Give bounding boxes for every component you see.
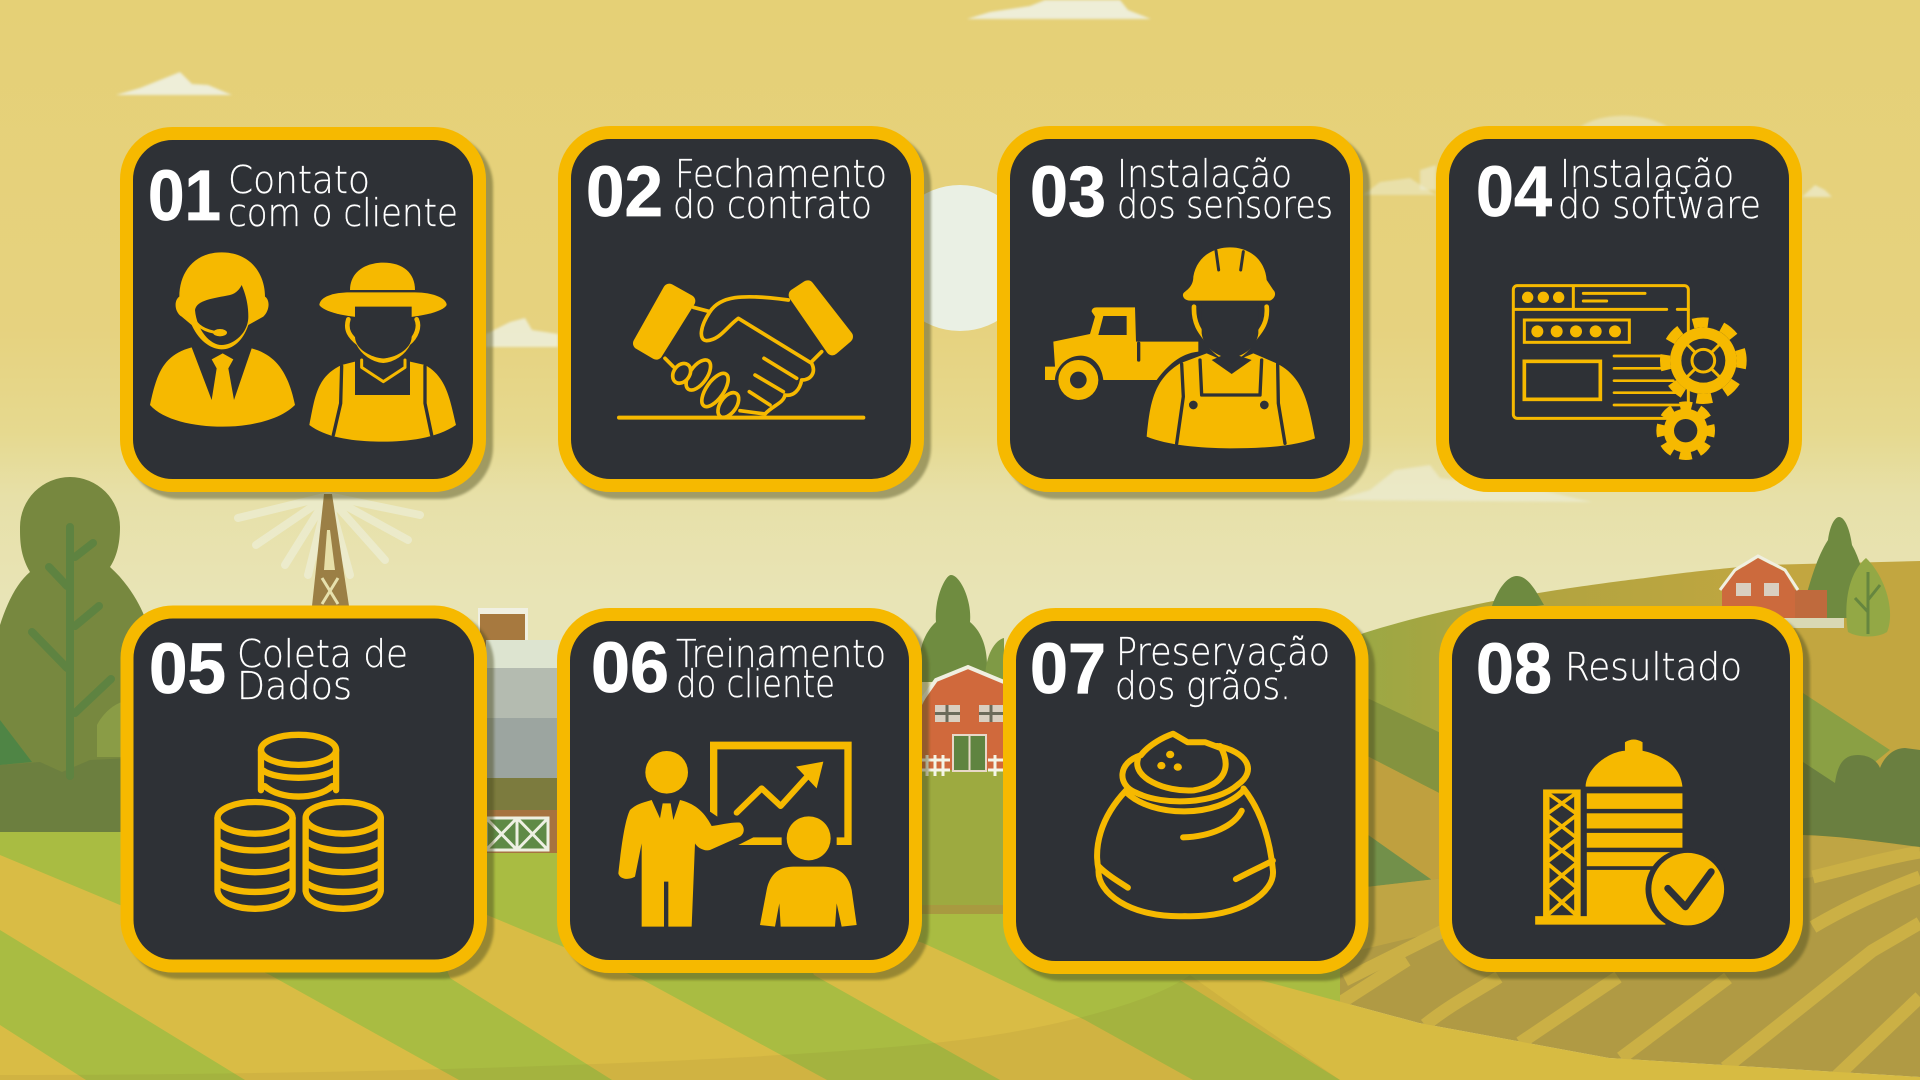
card 02 heading — [673, 152, 887, 227]
card 06: treinamento do cliente — [564, 614, 929, 980]
card 04 heading — [1558, 152, 1761, 227]
icon: software window and gears — [1513, 286, 1742, 456]
sun — [887, 185, 1033, 331]
card 03 heading — [1117, 152, 1333, 227]
card 03 shadow — [1004, 133, 1370, 499]
card 07 heading: dos grãos. — [1115, 664, 1291, 708]
card 06 number: 06 — [591, 629, 669, 708]
card 05 number: 05 — [149, 630, 226, 709]
icon: sack of grain — [1097, 734, 1273, 916]
card 08: resultado — [1446, 612, 1810, 979]
card 01: contato com o cliente — [126, 134, 493, 499]
card 01 heading: com o cliente — [228, 191, 458, 235]
card 02 number: 02 — [586, 153, 663, 232]
right bushes — [1803, 748, 1920, 847]
left tree — [0, 477, 152, 832]
icon: handshake — [619, 287, 863, 421]
card 03: instalação dos sensores — [1004, 132, 1370, 499]
card 05 shadow — [127, 612, 494, 979]
card 05 heading: Coleta de — [237, 632, 408, 676]
card 07 heading: Preservação — [1116, 630, 1330, 674]
card 04 heading: do software — [1558, 183, 1761, 227]
card 04 panel — [1442, 132, 1796, 486]
card 02: fechamento do contrato — [564, 132, 931, 499]
darker hill bands — [1340, 685, 1890, 900]
card 01 panel — [126, 134, 480, 486]
right barn — [1720, 517, 1890, 636]
card 04: instalação do software — [1442, 132, 1796, 486]
right field — [1200, 835, 1920, 1077]
icon: attendant and farmer — [150, 252, 456, 442]
card 03 heading: dos sensores — [1117, 183, 1333, 227]
card 07 number: 07 — [1030, 630, 1106, 709]
card 05 heading: Dados — [237, 664, 352, 708]
card 06 shadow — [564, 615, 929, 980]
card 01 shadow — [127, 134, 493, 499]
middle tree — [919, 575, 987, 682]
clouds — [116, 0, 1832, 502]
card 07 panel — [1010, 614, 1362, 968]
card 08 heading: Resultado — [1565, 645, 1742, 689]
middle barn — [922, 665, 1004, 776]
card 01 number: 01 — [148, 157, 221, 236]
card 06 heading: Treinamento — [676, 632, 886, 676]
card 01 heading: Contato — [228, 158, 370, 202]
card 03 panel — [1004, 132, 1356, 486]
card 08 panel — [1446, 612, 1796, 966]
card 02 heading: do contrato — [673, 183, 872, 227]
icon: stacked database coins — [217, 735, 381, 909]
icon: grain silo with check — [1535, 740, 1730, 930]
card 05 heading — [237, 632, 408, 708]
card 02 heading: Fechamento — [675, 152, 887, 196]
card 04 number: 04 — [1476, 153, 1552, 232]
card 02 shadow — [565, 133, 931, 499]
card 02 panel — [564, 132, 918, 486]
icon: truck and worker — [1045, 247, 1315, 448]
card 07: preservação dos grãos — [1010, 614, 1375, 981]
card 06 heading — [676, 632, 886, 706]
card 08 number: 08 — [1476, 630, 1552, 709]
icon: presenter with chart and student — [618, 742, 857, 927]
card 06 heading: do cliente — [676, 662, 835, 706]
card 08 shadow — [1446, 613, 1810, 979]
distant tree on hill — [1490, 576, 1544, 612]
windmill — [238, 494, 420, 606]
card 07 shadow — [1010, 615, 1375, 981]
card 03 heading: Instalação — [1117, 152, 1292, 196]
foreground fields — [0, 770, 1920, 1080]
card 05: coleta de dados — [127, 612, 494, 979]
card 07 heading — [1115, 630, 1330, 708]
farm building — [478, 608, 558, 853]
card 03 number: 03 — [1030, 153, 1106, 232]
card 05 panel — [127, 612, 480, 966]
far hill — [1240, 561, 1920, 860]
card 04 heading: Instalação — [1560, 152, 1734, 196]
card 01 heading — [228, 158, 458, 235]
card 06 panel — [564, 614, 916, 966]
